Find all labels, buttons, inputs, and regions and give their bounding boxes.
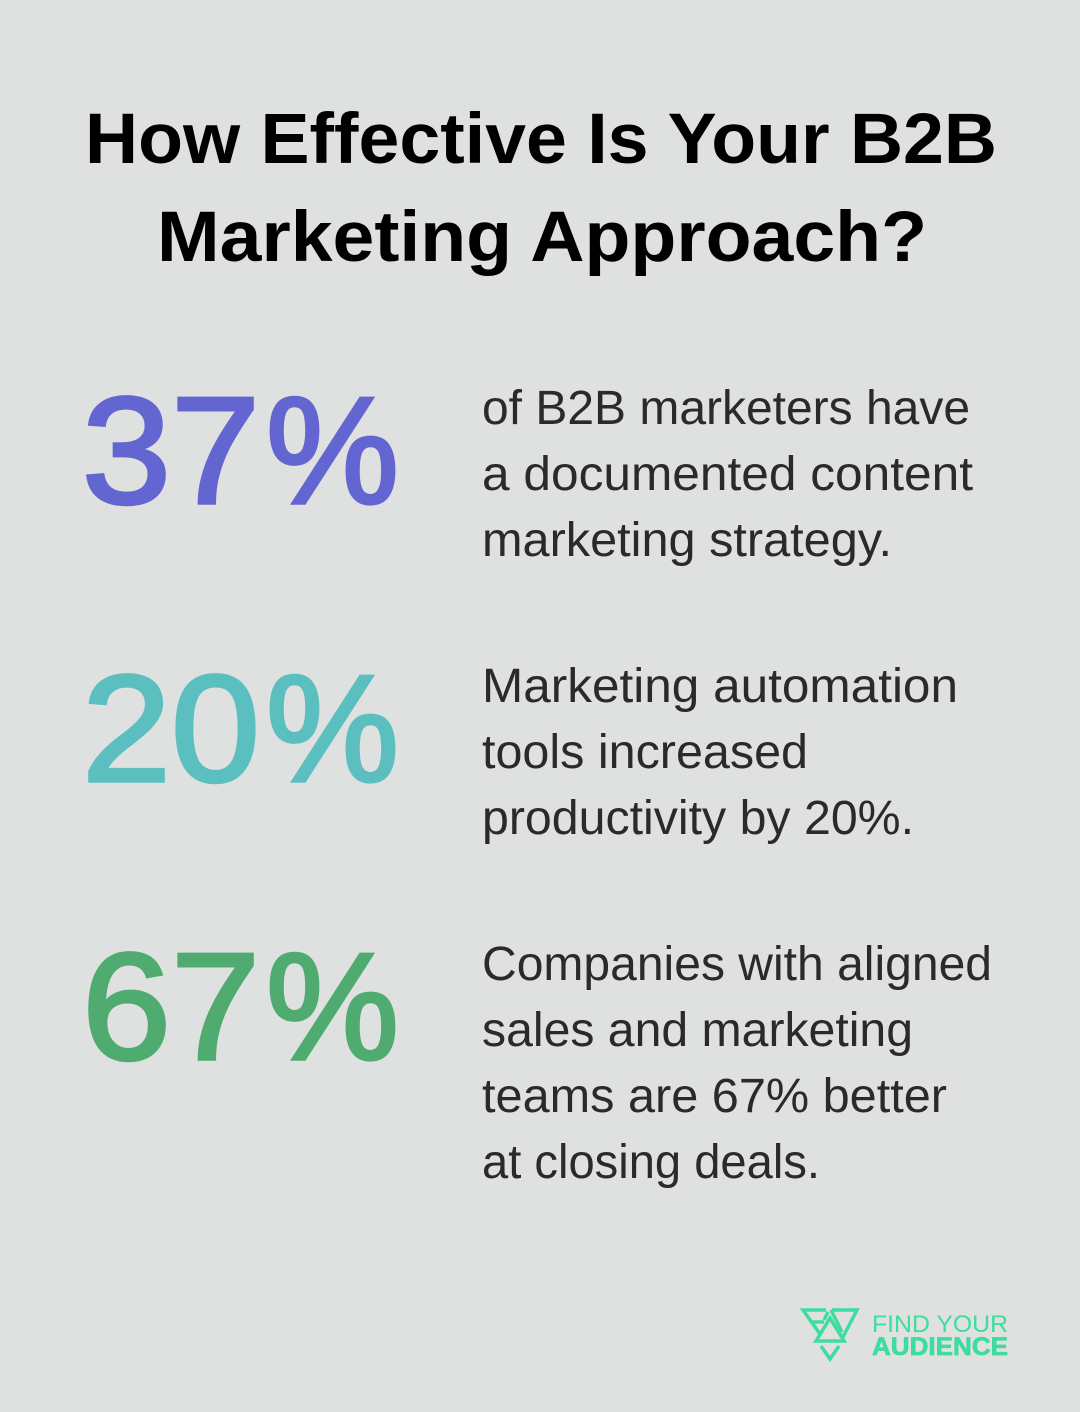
title: How Effective Is Your B2B bbox=[85, 100, 997, 179]
stat description: documented strategy bbox=[482, 381, 974, 567]
stat description: aligned teams: at closing deals. bbox=[482, 1135, 820, 1189]
stat number: 20%: % bbox=[266, 644, 399, 814]
stat number: 67%: 67 bbox=[82, 922, 260, 1092]
stat description: documented strategy: of B2B marketers have bbox=[482, 381, 970, 435]
stat row: 20% bbox=[82, 644, 958, 845]
stat description: automation productivity: productivity by 20%. bbox=[482, 791, 914, 845]
icon: triangle logo mark bbox=[803, 1310, 857, 1359]
logo: Find Your Audience bbox=[803, 1310, 1008, 1361]
stat number: 67%: % bbox=[266, 922, 399, 1092]
stat description: aligned teams: sales and marketing bbox=[482, 1003, 913, 1057]
stat row: 37% bbox=[82, 366, 974, 567]
stat description: automation productivity bbox=[482, 659, 958, 845]
stat number: 67% bbox=[82, 922, 399, 1092]
title bbox=[85, 100, 997, 277]
stat description: documented strategy: marketing strategy. bbox=[482, 513, 892, 567]
stat description: automation productivity: tools increased bbox=[482, 725, 808, 779]
stat description: automation productivity: Marketing automation bbox=[482, 659, 958, 713]
stat description: aligned teams: teams are 67% better bbox=[482, 1069, 947, 1123]
logo wordmark: FIND YOUR bbox=[872, 1311, 1008, 1338]
stat number: 20% bbox=[82, 644, 399, 814]
stat description: aligned teams bbox=[482, 937, 992, 1189]
stat description: aligned teams: Companies with aligned bbox=[482, 937, 992, 991]
stat number: 37%: 37 bbox=[82, 366, 260, 536]
stat row: 67% bbox=[82, 922, 992, 1189]
logo wordmark: AUDIENCE bbox=[872, 1333, 1008, 1361]
stat number: 20%: 20 bbox=[82, 644, 260, 814]
stat number: 37%: % bbox=[266, 366, 399, 536]
logo wordmark bbox=[872, 1311, 1008, 1361]
title: Marketing Approach? bbox=[157, 198, 927, 277]
stat description: documented strategy: a documented content bbox=[482, 447, 974, 501]
stat number: 37% bbox=[82, 366, 399, 536]
